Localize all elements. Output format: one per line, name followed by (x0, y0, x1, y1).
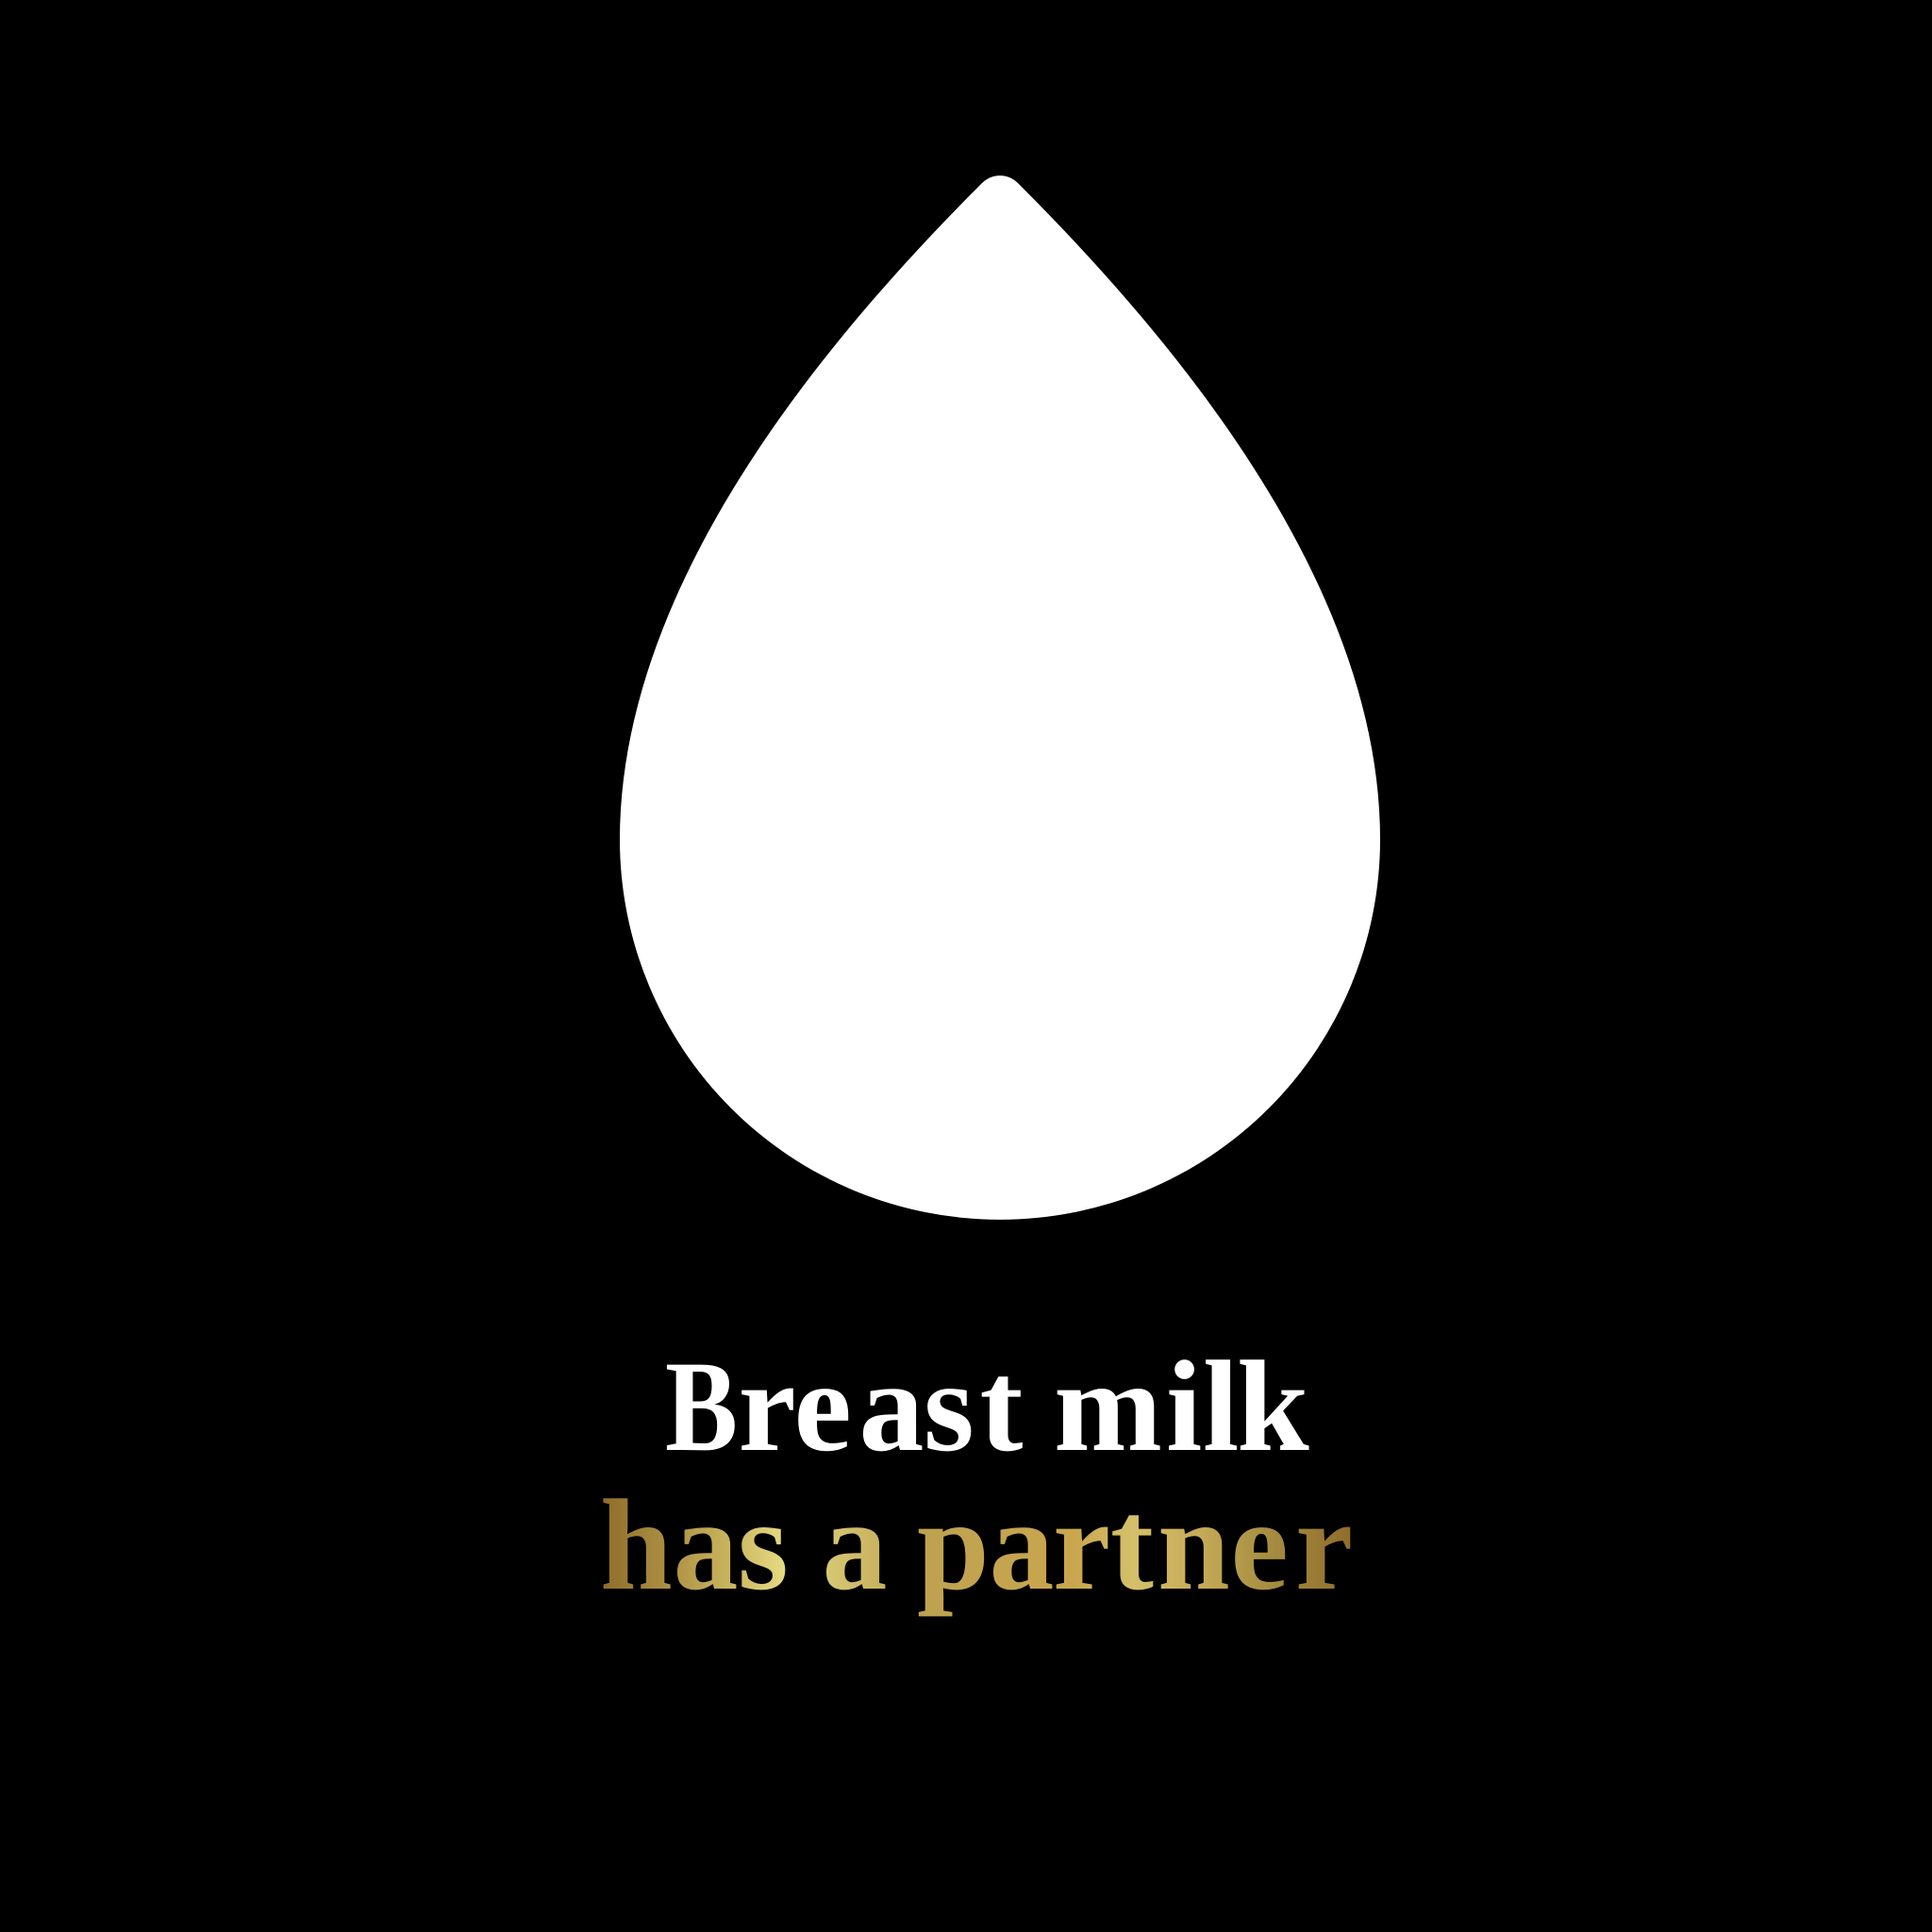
title line 2: gold gradient: has a partner (600, 1473, 1353, 1617)
title line 1: white: B (665, 1334, 738, 1478)
title (600, 1334, 1353, 1617)
icon: white milk drop (620, 175, 1380, 1220)
title line 1: white: reast milk (738, 1334, 1309, 1478)
